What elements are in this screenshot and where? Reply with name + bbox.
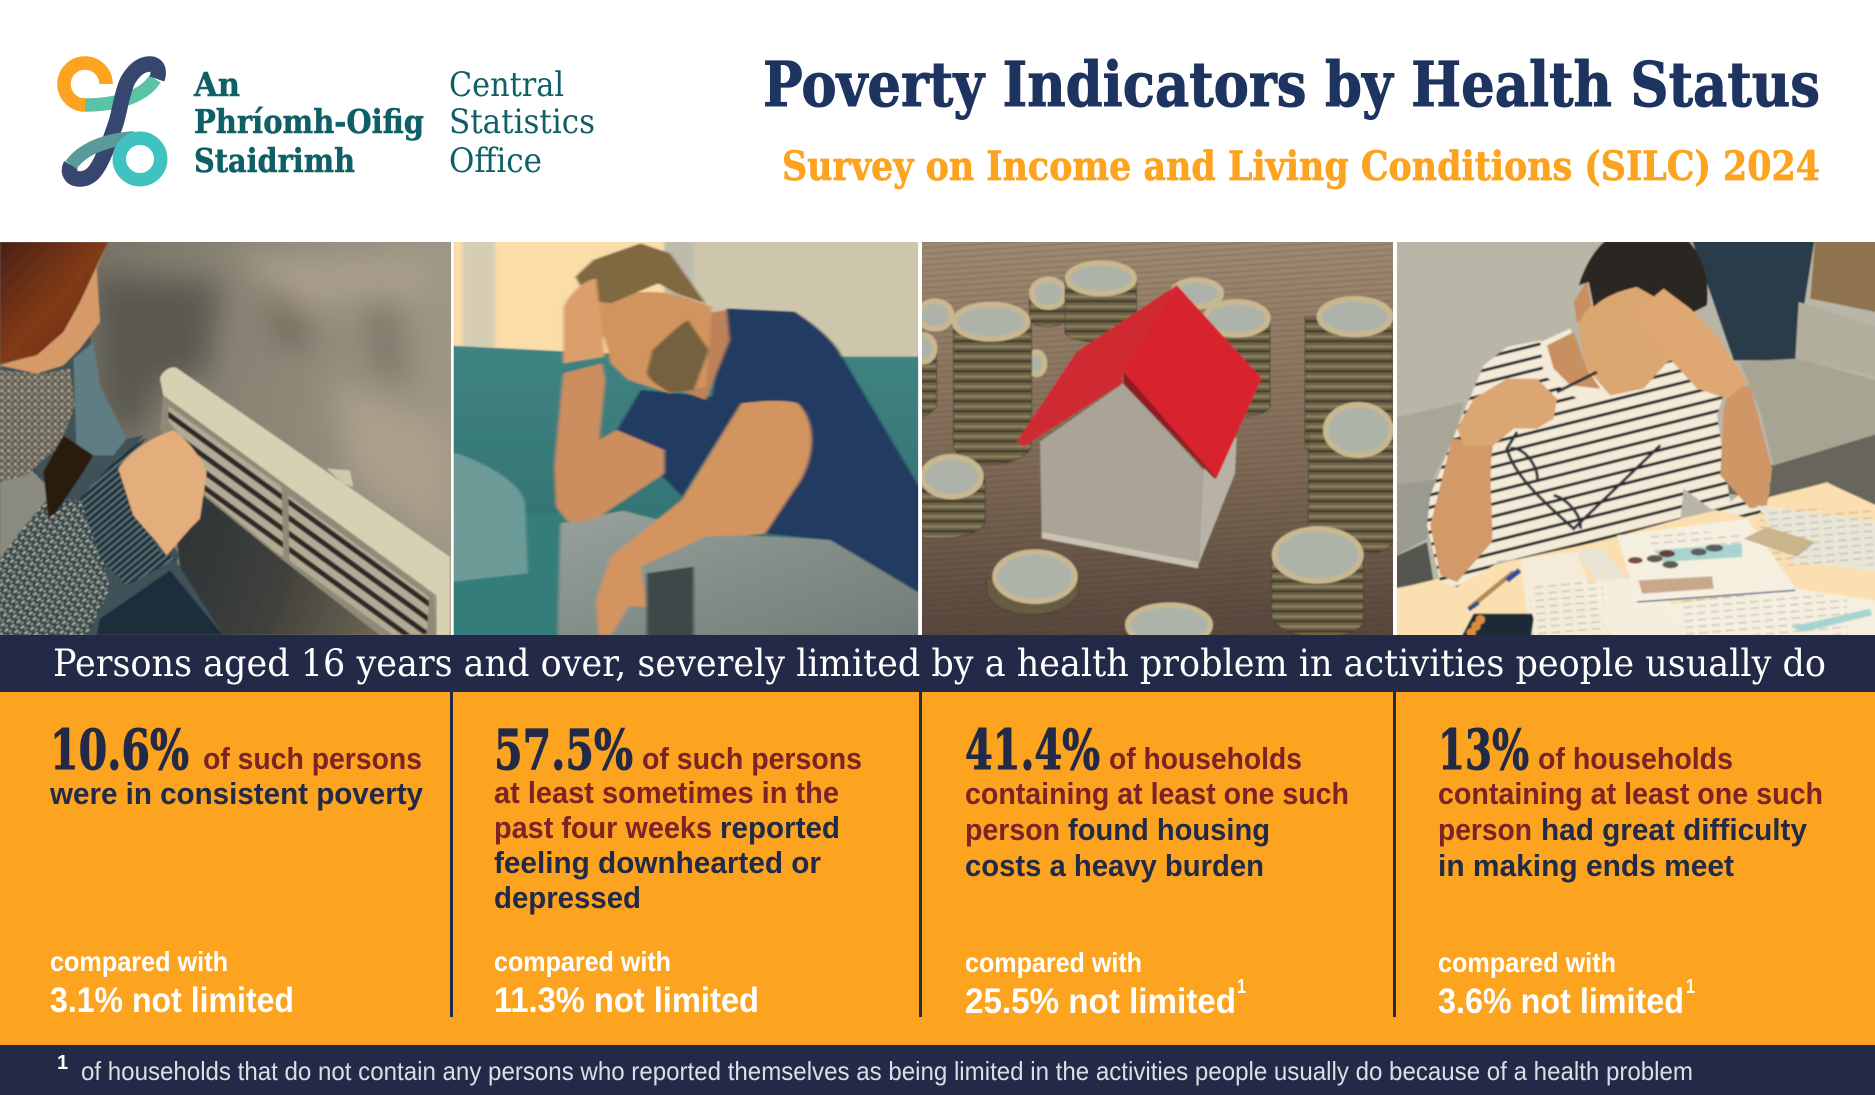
bills and coins on the table xyxy=(1459,505,1875,642)
divider xyxy=(450,692,453,1017)
logo text: English name: Statistics xyxy=(449,102,595,142)
footnote xyxy=(0,1045,1875,1095)
glasses xyxy=(1507,372,1660,529)
photo: woman stressed over bills at a table xyxy=(1390,235,1875,642)
description: downhearted or depressed xyxy=(494,742,862,915)
panel: making ends meet xyxy=(1438,717,1823,1021)
logo text: Irish name: Phríomh-Oifig xyxy=(194,102,424,141)
comparison: 25.5% not limited xyxy=(965,947,1246,1021)
stat: 13%: 13% xyxy=(1438,717,1529,782)
logo text: English name xyxy=(449,65,595,181)
description: downhearted or depressed: feeling downhearted or xyxy=(494,846,821,880)
description: consistent poverty: of such persons xyxy=(203,742,422,776)
description: downhearted or depressed: depressed xyxy=(494,881,641,915)
comparison: 3.1% not limited: compared with xyxy=(50,946,228,977)
description: housing costs: person xyxy=(965,813,1060,847)
logo text: English name: Central xyxy=(449,65,564,105)
logo text: Irish name: Staidrimh xyxy=(194,141,355,180)
divider xyxy=(1393,692,1396,1017)
logo text: Irish name xyxy=(193,65,424,180)
description: making ends meet xyxy=(1438,742,1823,883)
description: consistent poverty xyxy=(49,742,423,811)
logo: Central Statistics Office xyxy=(64,63,595,181)
comparison: 3.1% not limited: 3.1% not limited xyxy=(50,981,294,1020)
description: making ends meet: containing at least one such xyxy=(1438,777,1823,811)
description: housing costs: costs a heavy burden xyxy=(965,849,1264,883)
comparison: 25.5% not limited: 1 xyxy=(1237,976,1246,998)
comparison: 11.3% not limited: 11.3% not limited xyxy=(494,981,759,1020)
house xyxy=(1017,285,1262,568)
comparison: 3.1% not limited xyxy=(50,946,294,1020)
stat: 57.5%: 57.5% xyxy=(494,717,633,782)
divider xyxy=(919,692,922,1017)
photo: man on sofa holding his head xyxy=(439,233,931,643)
panel: downhearted or depressed xyxy=(494,717,862,1020)
description: downhearted or depressed: of such persons xyxy=(642,742,862,776)
stat: 41.4%: 41.4% xyxy=(965,717,1100,782)
comparison: 11.3% not limited: compared with xyxy=(494,946,671,977)
shirt and arms xyxy=(1427,235,1772,587)
description: making ends meet: in making ends meet xyxy=(1438,849,1734,883)
description: housing costs: containing at least one such xyxy=(965,777,1349,811)
description: downhearted or depressed: past four weeks xyxy=(494,811,712,845)
description: housing costs: of households xyxy=(1109,742,1302,776)
orange statistics panel background xyxy=(0,692,1875,1045)
footnote: of households that do not contain any persons who reported themselves as being limited in the activities people usually do because of a health problem xyxy=(81,1056,1693,1086)
comparison: 25.5% not limited: compared with xyxy=(965,947,1142,978)
header background xyxy=(0,0,1875,242)
banner: population description: Persons aged 16 years and over, severely limited by a health problem in activities people usually do xyxy=(53,642,1826,685)
footnote: 1 xyxy=(57,1052,68,1074)
coin stacks behind the house xyxy=(913,263,1393,645)
comparison: 3.6% not limited xyxy=(1438,947,1695,1021)
description: consistent poverty: were in consistent poverty xyxy=(49,777,423,811)
photo: woman warming hands at a heater xyxy=(0,235,460,642)
description: downhearted or depressed: reported xyxy=(720,811,840,845)
panel: housing costs xyxy=(965,717,1349,1021)
description: making ends meet: person xyxy=(1438,813,1532,847)
icon: CSO knot symbol xyxy=(64,63,161,180)
comparison: 25.5% not limited: 25.5% not limited xyxy=(965,982,1236,1021)
panel: consistent poverty xyxy=(49,717,423,1020)
comparison: 11.3% not limited xyxy=(494,946,759,1020)
description: housing costs xyxy=(965,742,1349,883)
stat: 10.6%: 10.6% xyxy=(50,717,189,782)
comparison: 3.6% not limited: 1 xyxy=(1686,976,1695,998)
comparison: 3.6% not limited: compared with xyxy=(1438,947,1616,978)
description: downhearted or depressed: at least sometimes in the xyxy=(494,776,839,810)
photo: model house surrounded by coin stacks xyxy=(913,233,1407,647)
description: housing costs: found housing xyxy=(1068,813,1270,847)
logo text: English name: Office xyxy=(449,141,542,181)
description: making ends meet: had great difficulty xyxy=(1541,813,1807,847)
description: making ends meet: of households xyxy=(1538,742,1733,776)
comparison: 3.6% not limited: 3.6% not limited xyxy=(1438,982,1684,1021)
logo text: Irish name: An xyxy=(193,65,240,104)
